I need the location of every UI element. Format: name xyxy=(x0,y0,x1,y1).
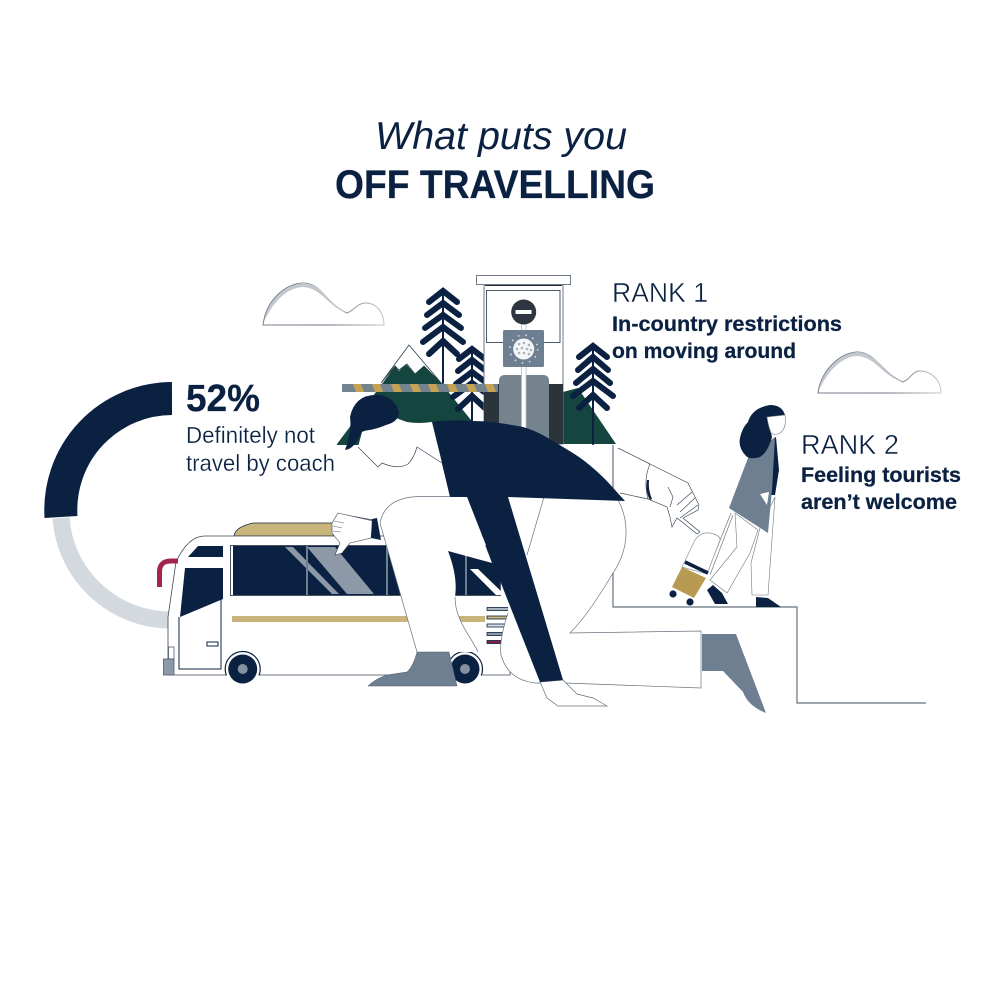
torso and arm xyxy=(432,420,625,682)
rank 2 text xyxy=(801,429,961,514)
pillar xyxy=(499,375,549,442)
rear leg xyxy=(501,497,701,688)
suitcase xyxy=(669,513,733,606)
ground hand xyxy=(540,680,607,706)
left hand on coach xyxy=(332,513,381,555)
hair xyxy=(740,405,785,458)
donut chart: 52 percent xyxy=(61,398,172,620)
right arm xyxy=(618,448,650,499)
front wheel xyxy=(224,652,262,690)
bumper xyxy=(164,647,174,675)
rank 1 text xyxy=(612,277,842,363)
face xyxy=(767,415,785,434)
coach xyxy=(160,523,511,690)
man in navy top xyxy=(332,395,766,713)
barrier arm xyxy=(342,384,498,392)
rank 2 text: RANK 2 xyxy=(801,429,899,460)
neck and face xyxy=(358,418,442,467)
front leg xyxy=(751,497,775,595)
shoes xyxy=(707,585,781,607)
rank 2 text: aren’t welcome xyxy=(801,490,957,514)
front windows xyxy=(180,546,223,617)
title: What puts you xyxy=(375,115,627,158)
title xyxy=(335,115,655,207)
booth roof xyxy=(476,276,570,284)
left arm line xyxy=(340,514,373,520)
mirror xyxy=(160,561,178,587)
title: OFF TRAVELLING xyxy=(335,163,655,207)
hair xyxy=(345,395,399,450)
rear wheel xyxy=(446,652,484,690)
tunic xyxy=(729,437,775,533)
woman with suitcase xyxy=(669,405,785,607)
navy sleeve xyxy=(771,437,779,495)
stripe xyxy=(232,616,485,622)
right hand pointing down xyxy=(646,464,700,534)
front leg xyxy=(380,497,492,652)
coach body xyxy=(168,536,510,675)
steps xyxy=(613,445,926,703)
stat text: 52 percent: Definitely not xyxy=(186,422,316,448)
rank 2 text: Feeling tourists xyxy=(801,463,961,487)
stat text: 52 percent xyxy=(186,378,335,476)
front shoe xyxy=(368,652,457,686)
rank 1 text: on moving around xyxy=(612,339,796,363)
vents xyxy=(487,608,511,644)
no entry sign xyxy=(511,300,536,324)
stat text: 52 percent: travel by coach xyxy=(186,450,335,476)
rear leg xyxy=(710,513,758,593)
side window xyxy=(230,546,505,596)
rear shoe xyxy=(702,634,766,713)
cloud left xyxy=(263,283,384,325)
rank 1 text: RANK 1 xyxy=(612,277,708,308)
virus sign xyxy=(503,330,544,367)
tree left xyxy=(423,291,463,383)
pole xyxy=(522,320,526,440)
checkpoint booth xyxy=(476,276,570,444)
hand in pocket xyxy=(760,492,769,505)
door xyxy=(179,599,221,669)
mountains xyxy=(337,345,616,445)
tree right xyxy=(573,346,613,444)
stat text: 52 percent: 52% xyxy=(186,378,260,420)
rank 1 text: In-country restrictions xyxy=(612,312,842,336)
tree middle xyxy=(453,349,491,422)
cloud right xyxy=(818,352,941,393)
roof rack xyxy=(234,523,334,536)
